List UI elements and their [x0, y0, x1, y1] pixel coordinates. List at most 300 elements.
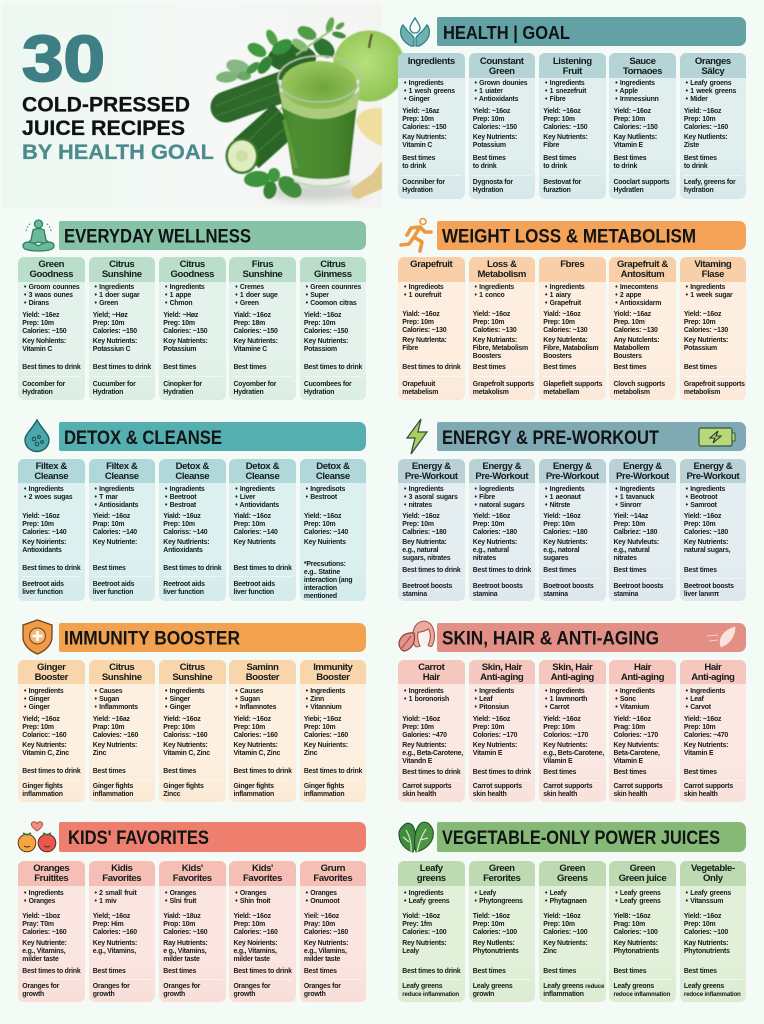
- benefit: [93, 783, 133, 799]
- benefit: Carrot supports: [402, 783, 451, 790]
- ingredients: • Leafy greens: [615, 890, 661, 897]
- recipe card: [18, 660, 84, 802]
- card title: Cleanse: [246, 471, 279, 482]
- best times: Best times to drink: [233, 968, 292, 974]
- best times: Best times to drink: [304, 364, 362, 371]
- ingredients: • Ingredients: [686, 486, 725, 493]
- ingredients: • Ingredients: [165, 688, 205, 695]
- card title: [229, 660, 296, 684]
- title line: cold-pressed: COLD-PRESSED: [22, 92, 190, 116]
- nutrients: Key Nutrients:: [684, 742, 728, 749]
- benefit: inflammation: [304, 791, 344, 798]
- benefit: Hydratlen: [613, 187, 643, 194]
- benefit: Beetroot boosts: [684, 583, 734, 590]
- ingredients: • 1 miv: [94, 898, 116, 905]
- recipe card: [18, 459, 84, 601]
- card title: Citrus: [180, 662, 205, 673]
- nutrients: milder taste: [163, 956, 200, 962]
- card title: [680, 53, 746, 78]
- stats: [684, 311, 728, 335]
- stats: [543, 716, 588, 740]
- stats: [473, 311, 517, 335]
- nutrients: Key Nutriants:: [473, 337, 517, 344]
- nutrients: milder taste: [304, 956, 340, 962]
- recipe card: [468, 861, 535, 1002]
- nutrients: Kay Nutlients:: [613, 134, 657, 141]
- benefit: [93, 983, 130, 999]
- best times: Best times: [684, 155, 717, 162]
- nutrients: [684, 742, 728, 758]
- nutrients: Antioxidants: [22, 547, 62, 554]
- ingredients: [235, 284, 278, 308]
- recipe card: [88, 459, 155, 601]
- nutrients: [473, 337, 528, 361]
- benefit: skin health: [402, 791, 436, 798]
- benefit: Bestovat for: [543, 179, 581, 186]
- stats: Calories: ~140: [22, 529, 66, 536]
- nutrients: Key Nuirients:: [304, 742, 348, 749]
- benefit: Hydration: [304, 389, 334, 396]
- ingredients: • Ingredients: [686, 688, 725, 695]
- ingredients: • 2 appe: [615, 292, 641, 299]
- card title: Cleanse: [175, 471, 209, 482]
- stats: Calories: ~100: [684, 929, 728, 936]
- benefit: Cooclart supports: [613, 179, 669, 186]
- nutrients: Vitandn E: [402, 758, 432, 765]
- nutrients: Key Nutrients:: [473, 742, 517, 749]
- stats: [543, 108, 588, 131]
- stats: Yield: ~16oz: [543, 716, 581, 723]
- ingredients: [235, 486, 279, 510]
- best times: Best times to drink: [22, 968, 81, 974]
- card title: Goodness: [29, 269, 73, 280]
- ingredients: • Ingredients: [306, 688, 345, 695]
- nutrients: Potassiun C: [93, 346, 130, 353]
- ingredients: • Ingredients: [615, 486, 655, 493]
- benefit: Ginger fights: [163, 783, 204, 790]
- stats: Prop: 10m: [163, 921, 195, 928]
- recipe card: [609, 459, 676, 601]
- best times: to drink: [473, 163, 496, 170]
- nutrients: Vitamin E: [473, 750, 502, 757]
- benefit: inflammation: [233, 791, 274, 798]
- nutrients: [613, 940, 659, 956]
- card title: Listening: [553, 56, 592, 67]
- nutrients: Key Nutrients:: [233, 338, 278, 345]
- recipe card: [229, 257, 296, 400]
- card title: [300, 861, 366, 886]
- nutrients: e.g., Vilamins,: [304, 948, 347, 954]
- cucumber back: [216, 80, 285, 116]
- best times: Best times: [613, 155, 646, 162]
- ingredients: [404, 486, 458, 510]
- stats: [473, 513, 517, 537]
- ingredients: • Grown dounies: [474, 80, 527, 87]
- best times: Best times: [613, 567, 646, 574]
- stats: Prag: 10m: [613, 724, 645, 731]
- card title: [609, 660, 676, 684]
- ingredients: • Super: [306, 292, 329, 299]
- stats: Calories: ~140: [304, 529, 348, 536]
- card title: Carrot: [418, 662, 444, 673]
- panel: Immunity Booster: [18, 616, 366, 802]
- ingredients: • Ingredients: [545, 688, 585, 695]
- card title: Booster: [246, 672, 279, 683]
- best times: Best times: [473, 364, 506, 371]
- ingredients: [404, 80, 455, 103]
- nutrients: Vitamin C, Zinc: [233, 750, 280, 757]
- nutrients: [233, 940, 277, 964]
- card title: Anti-aging: [691, 672, 734, 683]
- soft shadow: [265, 184, 365, 200]
- card title: Kids': [182, 863, 203, 874]
- ingredients: • Vitamium: [615, 704, 649, 711]
- card title: Flase: [702, 269, 724, 280]
- stats: Calories: ~160: [93, 929, 137, 936]
- card title: Green: [38, 259, 64, 270]
- stats: [543, 513, 587, 537]
- card title: Booster: [35, 672, 68, 683]
- stats: Yield: ~16oz: [543, 108, 581, 115]
- stats: Yield: ~16ez: [22, 312, 59, 319]
- stats: Prep: 10m: [473, 116, 504, 123]
- stats: Yiold: ~16oz: [402, 716, 440, 723]
- benefit: Boetroot boosts: [543, 583, 594, 590]
- benefit: [684, 983, 741, 999]
- card title: [468, 459, 535, 483]
- stats: Yield: ~16oz: [684, 513, 721, 520]
- panel: Weight Loss and Metabolism: [398, 216, 746, 400]
- card title: Green: [489, 66, 515, 77]
- nutrients: e.g., natoral: [543, 547, 579, 554]
- card title: Fruit: [563, 66, 582, 77]
- stats: [22, 312, 66, 335]
- nutrients: [543, 940, 588, 956]
- stats: [684, 913, 728, 937]
- ingredients: [545, 284, 585, 308]
- ingredients: • Fibre: [474, 494, 495, 501]
- ingredients: [306, 688, 345, 712]
- best times: [613, 154, 646, 170]
- card title: [159, 459, 226, 483]
- nutrients: Kay Nutrients:: [402, 134, 447, 141]
- nutrients: Zinc: [543, 948, 557, 954]
- benefit: inflammation: [543, 991, 584, 998]
- ingredients: • Irmnessiunn: [615, 96, 659, 103]
- ingredients: [615, 284, 661, 308]
- nutrients: [402, 337, 447, 353]
- nutrients: Key Nutrients:: [93, 338, 137, 345]
- nutrients: Potassiom: [304, 346, 337, 353]
- ingredients: • Ingredients: [235, 486, 275, 493]
- best times: to drink: [402, 163, 426, 170]
- stats: [22, 513, 66, 537]
- ingredients: • Carrot: [545, 704, 569, 711]
- stats: Prep: 10m: [304, 724, 335, 731]
- nutrients: Kay Nutrients:: [684, 940, 728, 946]
- ingredients: [94, 486, 138, 510]
- mint leaves on top of the glass: [216, 16, 347, 83]
- ingredients: • Ingredients: [404, 486, 444, 493]
- stats: Calories: ~130: [684, 327, 728, 334]
- stats: Calories: ~100: [402, 929, 446, 936]
- benefit: [684, 783, 733, 799]
- ingredients: • Leaf: [686, 696, 704, 703]
- nutrients: milder taste: [233, 956, 270, 962]
- card title: [539, 459, 606, 483]
- ingredients: • Ingredients: [94, 284, 134, 291]
- ingredients: • 2 woes sugas: [24, 494, 72, 501]
- benefit: Hydratien: [163, 389, 193, 396]
- icon: water drop: [24, 419, 50, 452]
- benefit: Ginger fights: [304, 783, 344, 790]
- card title: Hair: [634, 662, 651, 673]
- stats: Colories: ~170: [473, 732, 517, 739]
- ingredients: [94, 284, 140, 307]
- card title: Only: [703, 873, 723, 884]
- card title: Oranges: [695, 56, 731, 67]
- card title: Green: [559, 863, 585, 874]
- stats: Prep: 10m: [684, 116, 715, 123]
- icon: shield with cross: [22, 619, 53, 655]
- nutrients: Phytonutrients: [473, 948, 519, 954]
- best times: [402, 154, 436, 170]
- best times: Best times to drink: [473, 567, 531, 574]
- card title: [159, 257, 226, 282]
- stats: Calories: ~180: [684, 529, 728, 536]
- benefit: redoce inflammation: [613, 991, 670, 998]
- best times: Best times: [613, 968, 646, 974]
- heading banner: HEALTH | GOAL: [443, 23, 570, 43]
- icon: lightning bolt: [405, 418, 428, 455]
- stats: Yield: ~16oz: [22, 513, 60, 520]
- precautions: interaction (ang: [304, 577, 352, 584]
- stats: Prep: 10m: [402, 116, 434, 123]
- nutrients: [684, 940, 730, 956]
- nutrients: [93, 742, 137, 758]
- card title: Citrus: [320, 259, 345, 270]
- heading banner: [437, 822, 746, 852]
- recipe card: [468, 257, 535, 400]
- best times: Best times to drink: [233, 564, 292, 572]
- card title: [398, 257, 464, 282]
- stats: [93, 716, 138, 740]
- benefit: stamina: [402, 591, 427, 598]
- stats: [304, 913, 348, 937]
- benefit: Beetroot boosts: [473, 583, 523, 590]
- nutrients: natural sugars,: [684, 547, 730, 554]
- stats: Prep: 10m: [613, 116, 645, 123]
- benefit: growth: [233, 991, 255, 998]
- recipe card: [300, 660, 366, 802]
- ingredients: • 1 appe: [165, 292, 191, 299]
- benefit: skin health: [613, 791, 647, 798]
- stats: Prep: 10m: [613, 521, 645, 528]
- ingredients: • Inflamnotes: [235, 704, 276, 711]
- card title: Detox &: [176, 461, 209, 472]
- nutrients: [233, 338, 278, 354]
- nutrients: Key Nutrlenta:: [543, 337, 588, 344]
- nutrients: [93, 940, 137, 956]
- ingredients: • Grapefruit: [545, 300, 581, 307]
- ingredients: [474, 284, 514, 300]
- stats: Yield; ~16oz: [22, 716, 60, 723]
- best times: Best times: [543, 768, 576, 776]
- stats: [543, 311, 587, 335]
- stats: [613, 513, 657, 537]
- card title: Green juice: [619, 873, 666, 884]
- stats: Colorios: ~170: [543, 732, 588, 739]
- best times: Best times: [543, 567, 576, 574]
- nutrients: [163, 539, 209, 555]
- ingredients: • Ingradients: [165, 486, 205, 493]
- nutrients: Lealy: [402, 948, 419, 954]
- ingredients: • 1 ourefruit: [404, 292, 441, 299]
- benefit: growth: [22, 991, 44, 998]
- nutrients: Boosters: [473, 353, 501, 360]
- title line: juice recipes: JUICE RECIPES: [22, 116, 185, 140]
- stats: Yield: ~16oz: [402, 513, 440, 520]
- ingredients: [686, 486, 725, 510]
- benefit: Beetroot aids: [93, 581, 134, 588]
- ingredients: • Leafy: [545, 890, 567, 897]
- ingredients: • Dirans: [24, 300, 49, 307]
- ingredients: • Vitanssum: [686, 898, 723, 905]
- recipe card: [609, 660, 676, 802]
- card title: [468, 257, 535, 282]
- card title: Immunity: [313, 662, 352, 673]
- stats: Calories: ~100: [613, 929, 658, 936]
- ingredients: • Mider: [686, 96, 708, 103]
- precautions: e.g.. Statine: [304, 569, 340, 576]
- benefit: Beetroot boosts: [613, 583, 663, 590]
- nutrients: Zinc: [304, 750, 317, 757]
- benefit: Cocomber for: [22, 381, 65, 388]
- stats: [233, 716, 278, 740]
- benefit: [22, 380, 66, 396]
- ingredients: • Shin fnoit: [235, 898, 270, 905]
- heading banner: WEIGHT LOSS & METABOLISM: [442, 227, 696, 248]
- nutrients: [304, 940, 348, 964]
- nutrients: [543, 337, 598, 361]
- nutrients: [543, 742, 604, 766]
- big number 30: 30: [22, 22, 105, 95]
- card title: Kidis: [111, 863, 132, 874]
- benefit: [543, 583, 594, 599]
- nutrients: [613, 134, 657, 149]
- nutrients: sugares: [543, 555, 568, 562]
- benefit: skin health: [684, 791, 718, 798]
- nutrients: Key Nutrients:: [684, 337, 728, 344]
- ingredients: [615, 688, 655, 712]
- ingredients: • 1 week sugar: [686, 292, 733, 299]
- nutrients: [473, 539, 517, 563]
- card title: Booster: [316, 672, 350, 683]
- nutrients: milder taste: [22, 956, 59, 962]
- heading banner: [59, 822, 366, 852]
- nutrients: [613, 539, 659, 563]
- stats: Prep: 18m: [233, 320, 265, 327]
- precautions: [304, 561, 352, 601]
- benefit: Hydration: [473, 187, 503, 194]
- best times: Best times: [473, 968, 506, 974]
- heading banner: [59, 422, 366, 451]
- nutrients: Key Nutvients:: [613, 742, 659, 749]
- ingredients: • Inflammonts: [94, 704, 138, 711]
- benefit: [684, 381, 745, 397]
- benefit: Leafy greens: [402, 983, 442, 990]
- heading banner: [437, 221, 746, 250]
- benefit: [304, 381, 351, 397]
- benefit: [613, 583, 663, 599]
- stats: Prep: 10m: [543, 319, 575, 326]
- nutrients: Antioxidants: [163, 547, 203, 554]
- stats: Prep: 10m: [163, 521, 195, 528]
- card title: Counstant: [480, 56, 524, 67]
- benefit: Grapefrolt supports: [473, 381, 534, 388]
- ingredients: • Causes: [235, 688, 263, 695]
- heading banner: [59, 221, 366, 250]
- benefit: stamina: [473, 591, 497, 598]
- benefit: [233, 381, 276, 397]
- stats: Yield: ~16oz: [684, 311, 721, 318]
- benefit: [93, 380, 136, 396]
- benefit: Hydration: [402, 187, 433, 194]
- nutrients: Key Nutriente:: [93, 539, 137, 546]
- ingredients: • Ingredients: [686, 284, 725, 291]
- ingredients: • Pitonsiun: [474, 704, 509, 711]
- benefit: metakolism: [473, 389, 509, 396]
- nutrients: Key Nutlrients:: [163, 539, 209, 546]
- card title: Anti-aging: [551, 672, 594, 683]
- panel: Skin, Hair and Anti-Aging: [398, 616, 746, 802]
- nutrients: e.g., Bets-Carotene,: [543, 750, 604, 757]
- nutrients: [233, 742, 280, 758]
- ingredients: [615, 80, 659, 103]
- nutrients: Vitamin E: [684, 750, 713, 757]
- recipe card: [300, 861, 366, 1002]
- stats: Tield: ~16oz: [473, 913, 510, 920]
- card title: [300, 660, 366, 684]
- best times: Best times: [684, 768, 717, 776]
- recipe card: [609, 861, 676, 1002]
- card title: Grurn: [321, 863, 345, 874]
- nutrients: Boosters: [543, 353, 572, 360]
- recipe card: [680, 257, 746, 400]
- ingredients: • Ingredisots: [306, 486, 345, 493]
- ingredients: • Green counnres: [306, 284, 361, 291]
- stats: Yield: ~16oz: [473, 108, 510, 115]
- stats: [402, 513, 446, 537]
- stats: [402, 108, 446, 131]
- ingredients: [235, 890, 270, 906]
- benefit: Cucombees for: [304, 381, 351, 388]
- stats: [684, 716, 728, 740]
- benefit: stamina: [543, 591, 568, 598]
- card title: Grapefruit: [410, 259, 452, 270]
- nutrients: Rey Nutrients:: [402, 940, 447, 946]
- stats: Prep. 10m: [613, 319, 645, 326]
- card title: [300, 257, 366, 282]
- ingredients: • Ingredients: [24, 688, 64, 695]
- stats: Prap: 10m: [93, 724, 124, 731]
- benefit: [304, 783, 344, 799]
- card title: Ingredients: [408, 56, 455, 67]
- ingredients: • 1 boronorish: [404, 696, 449, 703]
- stats: Calories: ~160: [22, 929, 66, 936]
- ingredients: • Bestroot: [306, 494, 337, 501]
- stats: [163, 312, 208, 335]
